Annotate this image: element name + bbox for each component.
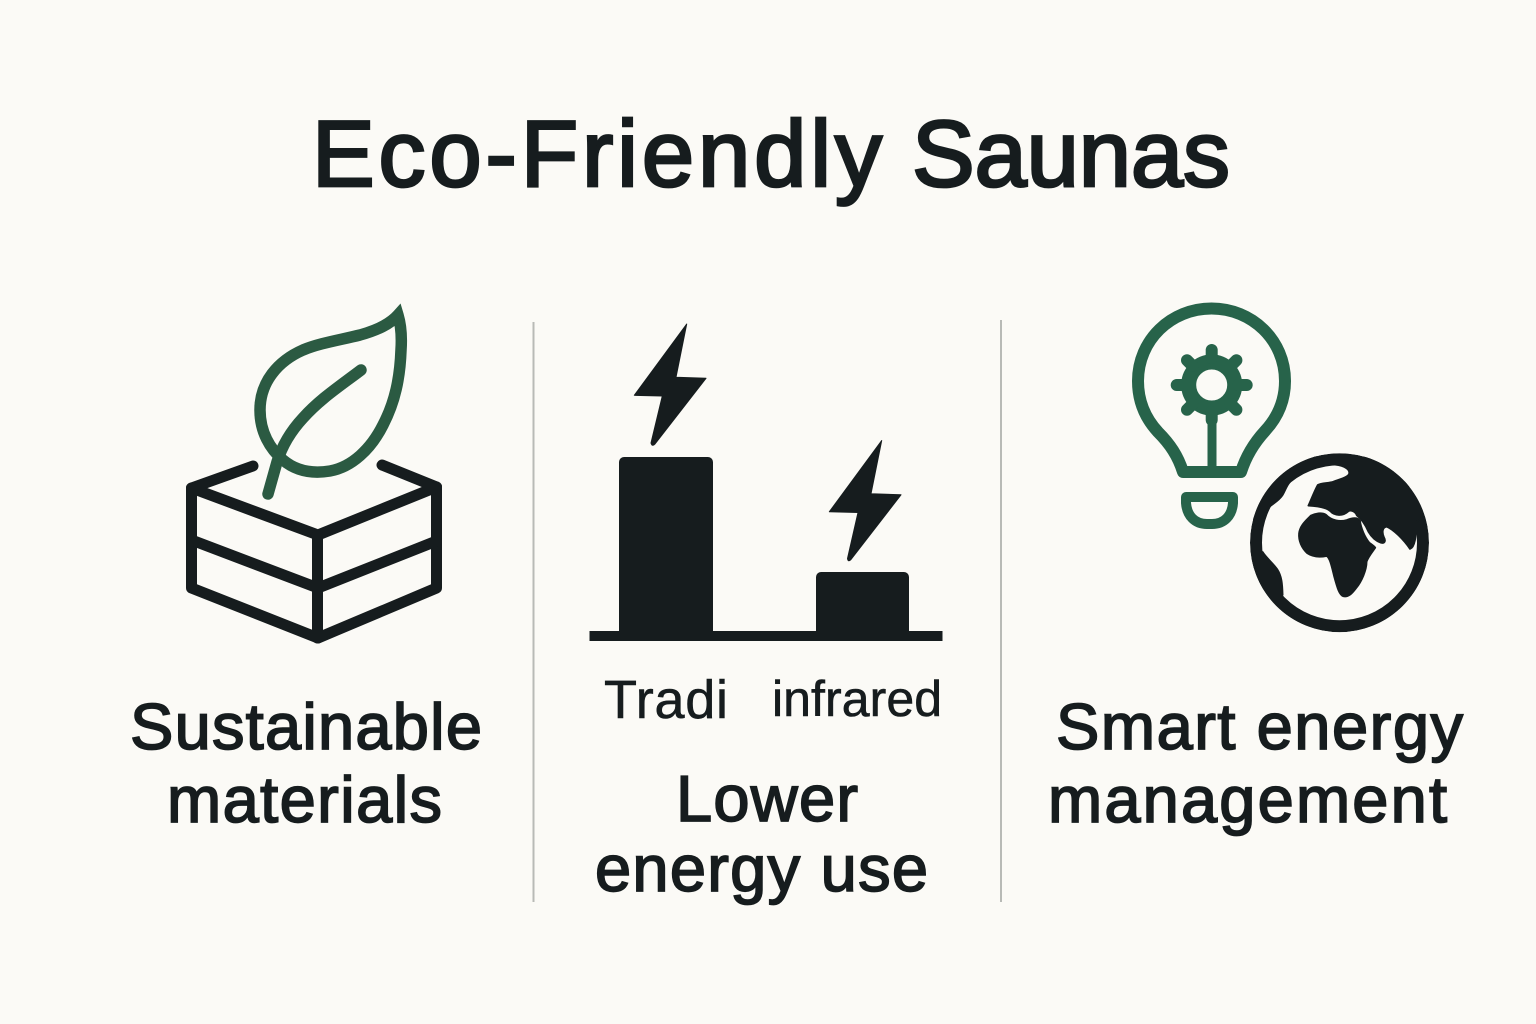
icon: lightning bolt large bar xyxy=(634,324,706,445)
bar label: infrared: infrared xyxy=(772,671,942,727)
icon: light bulb with gear xyxy=(1138,308,1285,524)
label: sustainable materials: materials xyxy=(167,763,442,836)
title: Saunas xyxy=(912,101,1230,206)
icon: gear xyxy=(1177,350,1247,420)
infographic canvas xyxy=(132,116,1464,906)
label: lower energy use: Lower xyxy=(676,762,858,835)
label: lower energy use xyxy=(595,762,928,905)
bar: traditional xyxy=(619,457,713,637)
icon: lightning bolt small bar xyxy=(829,440,901,561)
bar chart xyxy=(590,324,942,641)
panel: sustainable materials xyxy=(130,315,482,836)
label: smart energy management: Smart energy xyxy=(1056,690,1464,763)
label: smart energy management xyxy=(1048,690,1464,836)
icon: leaf xyxy=(260,315,401,494)
panel: smart energy management xyxy=(1048,308,1464,836)
panel: lower energy use xyxy=(590,324,942,905)
label: sustainable materials xyxy=(130,690,482,836)
label: smart energy management: management xyxy=(1048,763,1447,836)
icon: stacked box xyxy=(192,465,436,638)
label: sustainable materials: Sustainable xyxy=(130,690,482,763)
title: Eco-Friendly xyxy=(312,101,882,206)
icon: globe xyxy=(1252,453,1423,626)
bar label: traditional: Tradi xyxy=(604,670,728,730)
baseline xyxy=(590,631,942,641)
label: lower energy use: energy use xyxy=(595,832,928,905)
bar: infrared xyxy=(816,572,909,637)
title xyxy=(312,101,1230,206)
